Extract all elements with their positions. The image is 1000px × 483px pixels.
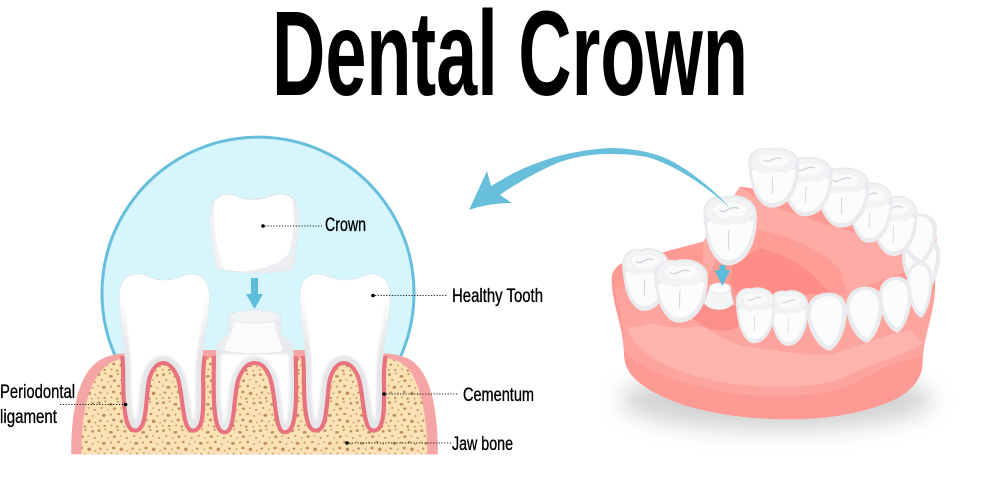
label: Periodontal ligament — [0, 382, 127, 428]
blue magnifier circle — [102, 137, 414, 362]
panel: tooth cross-section diagram — [0, 137, 543, 455]
label: Periodontal ligament: ligament — [0, 407, 58, 428]
big curved arrow — [469, 148, 730, 210]
icon: small down arrow — [246, 278, 263, 309]
label: Jaw bone — [345, 434, 513, 455]
gum base — [612, 187, 937, 419]
palate mid tone — [703, 230, 848, 297]
icon: small up/down arrow — [715, 265, 730, 286]
palate deep centre — [730, 248, 830, 297]
label: Crown: Crown — [325, 215, 366, 236]
front gum mid tone — [613, 287, 935, 396]
palate light area — [703, 187, 910, 293]
front gum light band — [627, 324, 923, 387]
socket gum around stump — [692, 300, 738, 331]
label: Jaw bone: Jaw bone — [452, 434, 513, 455]
label: Healthy Tooth — [371, 286, 543, 307]
floating crown — [703, 195, 757, 265]
label: Periodontal ligament: Periodontal — [0, 382, 75, 403]
label: Cementum: Cementum — [463, 385, 534, 406]
gum and jaw cross-section — [71, 350, 438, 454]
prepared tooth stump — [216, 310, 294, 430]
ground shadow — [620, 370, 933, 430]
label: Crown — [261, 215, 366, 236]
label: Healthy Tooth: Healthy Tooth — [452, 286, 543, 307]
panel: denture with crown placement — [612, 147, 940, 430]
dental crown piece — [210, 194, 299, 273]
label: Cementum — [382, 385, 534, 406]
front row of teeth — [622, 248, 932, 351]
prepared stump — [704, 283, 733, 310]
back row of teeth — [748, 147, 940, 294]
left healthy tooth — [119, 274, 210, 428]
right healthy tooth — [300, 274, 390, 428]
